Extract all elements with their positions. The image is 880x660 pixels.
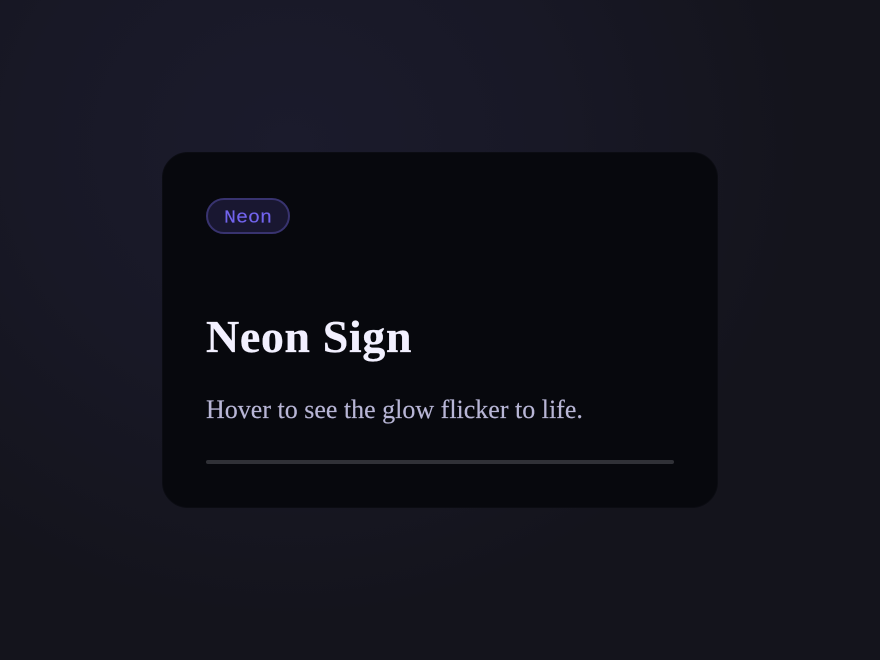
progress bar <box>206 460 674 464</box>
badge: Neon <box>206 198 290 234</box>
title: Neon Sign <box>206 311 412 362</box>
badge: Neon: Neon <box>224 208 272 229</box>
panel: card <box>162 152 718 508</box>
subtitle text: Hover to see the glow flicker to life. <box>206 395 583 424</box>
